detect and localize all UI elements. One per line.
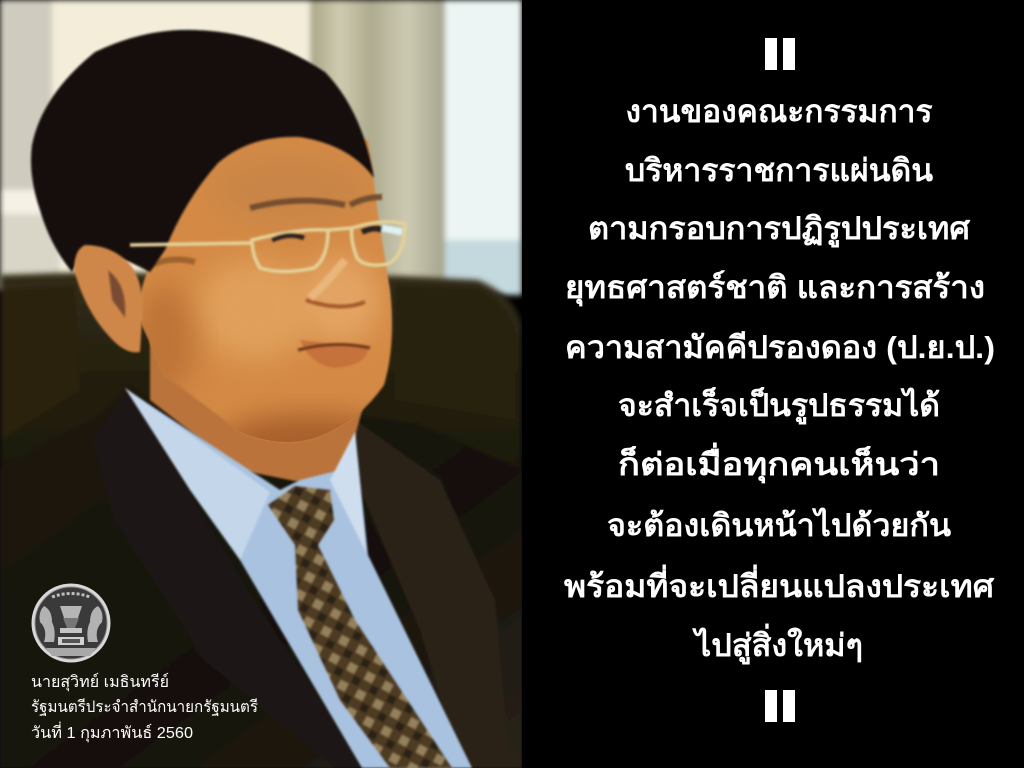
necktie: [268, 486, 452, 768]
neck: [150, 340, 365, 490]
quote text: จะสำเร็จเป็นรูปธรรมได้: [618, 386, 940, 425]
caption: minister name and date: [31, 672, 258, 743]
quote text: พร้อมที่จะเปลี่ยนแปลงประเทศ: [564, 564, 995, 604]
jacket lapels: [92, 392, 365, 768]
quote text: งานของคณะกรรมการ: [626, 94, 933, 129]
ear: [74, 245, 142, 352]
quote text: ยุทธศาสตร์ชาติ และการสร้าง: [565, 270, 985, 307]
caption: minister name and date: วันที่ 1 กุมภาพันธ์ 2560: [31, 721, 193, 743]
quote text: บริหารราชการแผ่นดิน: [625, 153, 933, 188]
face: [140, 135, 394, 442]
quote text: จะต้องเดินหน้าไปด้วยกัน: [607, 507, 951, 543]
shirt and collar: [125, 388, 472, 768]
opening quotation mark: [765, 38, 795, 70]
chair back: [0, 272, 522, 768]
quote text: ก็ต่อเมื่อทุกคนเห็นว่า: [618, 442, 940, 484]
panel: black quote background: [522, 0, 1024, 768]
icon: Thai government seal: [32, 584, 110, 662]
caption: minister name and date: รัฐมนตรีประจำสำนักนายกรัฐมนตรี: [31, 698, 258, 716]
glasses: [130, 222, 405, 272]
quote text: ตามกรอบการปฏิรูปประเทศ: [588, 211, 971, 248]
suit jacket: [0, 385, 522, 768]
hair: [31, 30, 374, 272]
quote text: ความสามัคคีปรองดอง (ป.ย.ป.): [565, 330, 995, 365]
photo background: wall, curtain and window: [0, 0, 522, 295]
photo: minister seated in profile: [0, 0, 522, 768]
quote text: ไปสู่สิ่งใหม่ๆ: [692, 623, 863, 665]
closing quotation mark: [765, 690, 795, 722]
quote text: [564, 94, 995, 665]
caption: minister name and date: นายสุวิทย์ เมธินทรีย์: [31, 672, 169, 692]
